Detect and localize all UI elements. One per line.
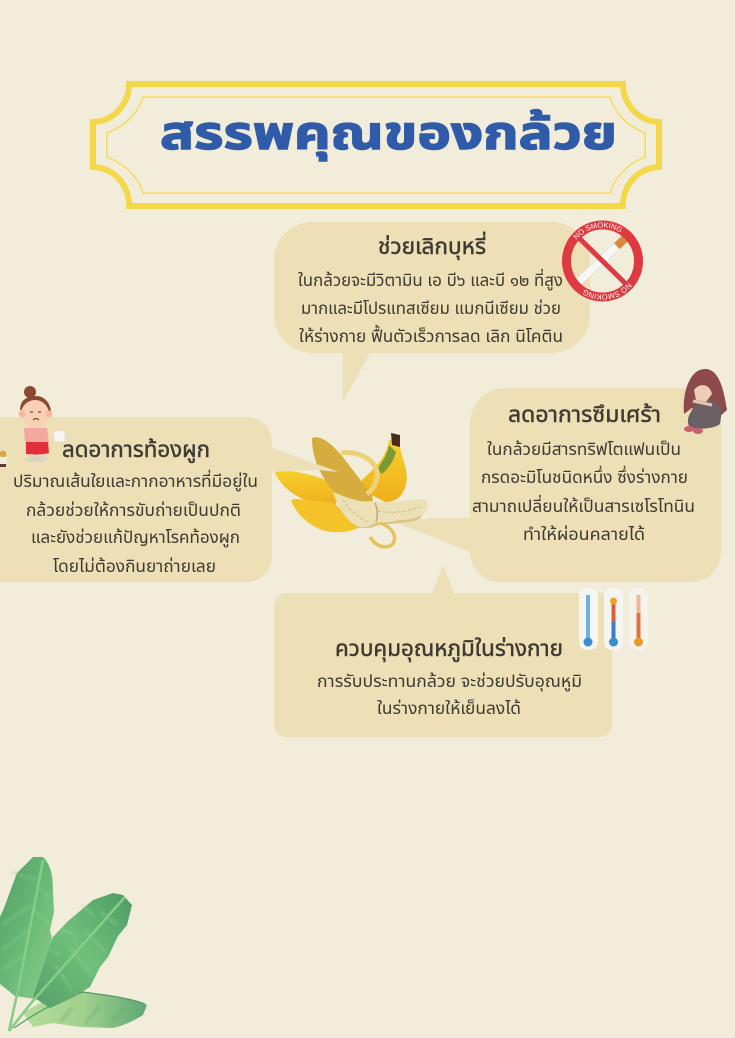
icon: banana leaves (0, 857, 147, 1031)
panel: body temperature (274, 565, 612, 737)
peel dark (312, 437, 373, 501)
body line 1: ปริมาณเส้นใยและกากอาหารที่มีอยู่ใน (13, 469, 258, 493)
icon: sad girl (684, 369, 727, 434)
thermometer mid (604, 588, 623, 650)
leaf back (23, 992, 147, 1028)
heading: ควบคุมอุณหภูมิในร่างกาย (335, 636, 563, 662)
title banner (93, 84, 659, 206)
cigarette (570, 231, 633, 290)
heading: ลดอาการซึมเศร้า (508, 402, 661, 427)
leaf right (33, 893, 132, 1008)
body line 3: ให้ร่างกาย ฟื้นตัวเร็วการลด เลิก นิโคติน (299, 324, 563, 346)
body line 4: ทำให้ผ่อนคลายได้ (523, 524, 645, 544)
body line 2: กล้วยช่วยให้การขับถ่ายเป็นปกติ (26, 500, 241, 520)
panel: depression (400, 388, 721, 582)
body line 3: และยังช่วยแก้ปัญหาโรคท้องผูก (31, 527, 240, 549)
heading: ลดอาการท้องผูก (62, 437, 210, 463)
icon: thermometers (579, 588, 648, 650)
body line 2: ในร่างกายให้เย็นลงได้ (377, 698, 521, 718)
heading: ช่วยเลิกบุหรี่ (378, 231, 486, 260)
bubble shape (274, 222, 590, 402)
banner frame inner (107, 97, 645, 193)
banner frame outer (93, 84, 659, 206)
icon: no smoking: NO SMOKING (573, 222, 622, 240)
thermometer hot (629, 588, 648, 650)
panel: constipation (0, 417, 339, 582)
body line 3: สามาถเปลี่ยนให้เป็นสารเซโรโทนิน (472, 494, 695, 516)
icon: small figure (0, 451, 7, 467)
peel ribbon bottom (370, 523, 395, 547)
icon: no smoking: NO SMOKING (583, 282, 632, 300)
icon: no smoking (562, 220, 643, 302)
body line 1: ในกล้วยมีสารทริฟโตแฟนเป็น (487, 439, 681, 459)
bubble shape (274, 565, 612, 737)
bubble shape (400, 388, 721, 582)
body line 1: ในกล้วยจะมีวิตามิน เอ บี๖ และบี ๑๒ ที่สูง (298, 268, 563, 292)
panel: quit smoking (274, 222, 590, 402)
bubble shape (0, 417, 339, 582)
body line 2: กรดอะมิโนชนิดหนึ่ง ซึ่งร่างกาย (481, 465, 688, 487)
title: สรรพคุณของกล้วย (160, 107, 617, 161)
peel ribbon top (341, 453, 377, 494)
leaf stems (9, 860, 125, 1031)
body line 4: โดยไม่ต้องกินยาถ่ายเลย (53, 556, 216, 576)
banana flesh (333, 492, 428, 527)
banana flesh shadow (345, 510, 425, 528)
leaf left (0, 857, 54, 1000)
body line 2: มากและมีโปรแทสเซียม แมกนีเซียม ช่วย (301, 299, 561, 318)
upper left banana (275, 470, 340, 505)
body line 1: การรับประทานกล้วย จะช่วยปรับอุณหูมิ (317, 671, 582, 693)
icon: girl with stomach ache (18, 386, 65, 462)
right banana (362, 439, 407, 502)
lower left banana (291, 499, 362, 532)
thermometer cold (579, 588, 598, 650)
icon: bananas (275, 433, 428, 547)
